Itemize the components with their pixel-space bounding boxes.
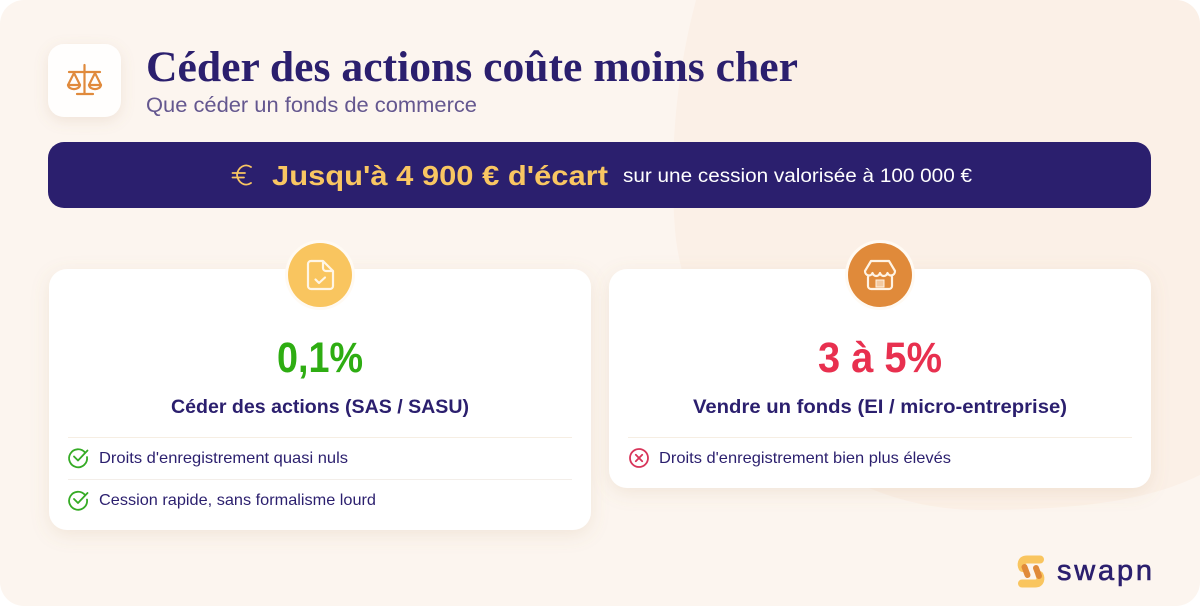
panel heading: Vendre un fonds (EI / micro-entreprise) (693, 397, 1067, 418)
subtitle: Que céder un fonds de commerce (146, 94, 477, 117)
banner highlight: Jusqu'à 4 900 € d'écart (272, 160, 608, 191)
list item 2: Cession rapide, sans formalisme lourd (99, 492, 376, 509)
title: Céder des actions coûte moins cher (146, 44, 798, 91)
banner (48, 142, 1151, 208)
icon: euro (232, 165, 251, 185)
panel heading: Céder des actions (SAS / SASU) (171, 397, 469, 418)
banner detail: sur une cession valorisée à 100 000 € (623, 166, 972, 187)
icon: scales in white tile (48, 44, 121, 117)
icon: document check (285, 240, 355, 310)
logo: swapn: swapn (1057, 555, 1152, 587)
stat: 3 à 5%: 3 à 5% (818, 334, 942, 382)
panel: fonds (609, 240, 1151, 488)
panel: actions (49, 240, 591, 530)
icon: shop (845, 240, 915, 310)
list item 1: Droits d'enregistrement quasi nuls (99, 450, 348, 467)
stat: 0,1%: 0,1% (277, 334, 363, 382)
list item: Droits d'enregistrement bien plus élevés (659, 450, 951, 467)
